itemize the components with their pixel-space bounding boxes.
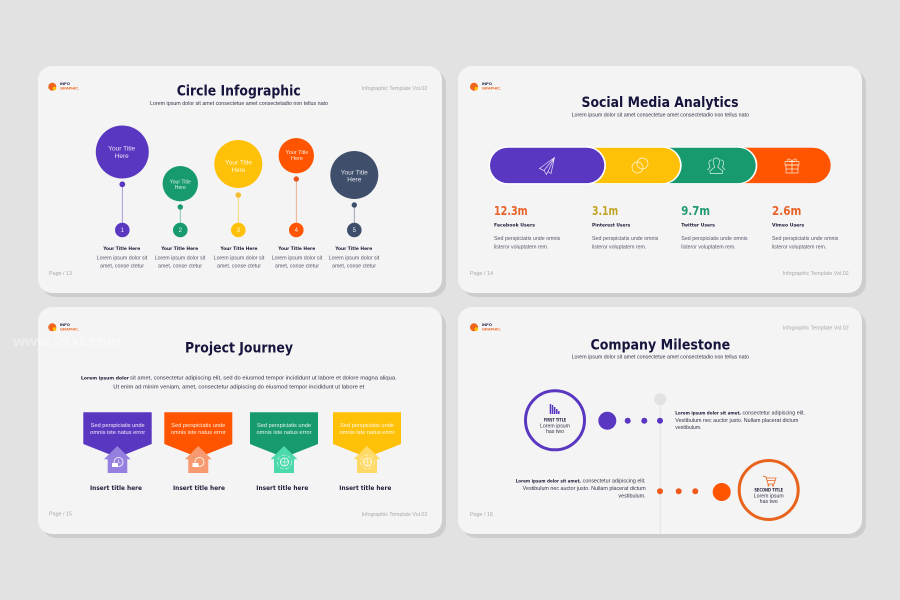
stat: vimeo users: listeror voluptatem rem. xyxy=(772,244,826,250)
logo: GRAPHIC. xyxy=(482,328,501,332)
circle item 2: amet, conse ctetur xyxy=(158,264,202,270)
circle item 1: Your Title Here xyxy=(102,246,140,252)
page number: Page / 14 xyxy=(470,271,493,277)
milestone 2 ring: SECOND TITLE xyxy=(754,487,783,492)
journey card 2: Sed perspiciatis unde xyxy=(171,423,226,429)
circle item 5: 5 xyxy=(353,228,357,234)
circle item 3: 3 xyxy=(237,228,241,234)
subtitle: Lorem ipsum dolor sit amet consectetue amet consectetadio non tellus nato xyxy=(572,355,749,361)
subtitle: Lorem ipsum dolor sit amet consectetue amet consectetadio non tellus nato xyxy=(150,101,328,107)
circle item 3: Here xyxy=(232,167,246,174)
stat: vimeo users: Vimeo Users xyxy=(772,222,805,228)
stat: vimeo users: Sed perspiciatis unde omnis xyxy=(772,236,839,242)
stat: pinterest users: 3.1m xyxy=(592,204,618,218)
milestone 1 text: consectetur adipiscing elit. xyxy=(742,411,805,417)
title: Social Media Analytics xyxy=(582,95,738,111)
milestone 2 text: Lorem ipsum dolor sit amet, xyxy=(516,479,581,485)
page number: Page / 15 xyxy=(49,512,72,518)
logo: GRAPHIC. xyxy=(60,328,79,332)
stat: vimeo users xyxy=(772,204,839,250)
intro paragraph: Ut enim ad minim veniam, amet, consectetur adipiscing do eiusmod tempor incididunt ut labore et xyxy=(113,384,365,390)
journey card 3: Insert title here xyxy=(256,484,309,492)
icon: shopping cart xyxy=(763,476,776,486)
panel: project journey xyxy=(38,307,446,538)
stat: pinterest users xyxy=(592,204,659,250)
icon: chat bubbles xyxy=(632,158,648,173)
journey card 1 xyxy=(83,412,152,492)
milestone 2 ring xyxy=(739,460,798,520)
stat: twitter users: listeror voluptatem rem. xyxy=(681,244,736,250)
circle item 2: Here xyxy=(175,185,186,191)
watermark: www.25xt.com xyxy=(12,333,121,349)
icon: bar chart xyxy=(550,404,560,414)
circle item 2: Your Title xyxy=(170,180,191,186)
circle item 3: Your Title Here xyxy=(220,246,258,252)
subtitle: Lorem ipsum dolor sit amet consectetue amet consectetadio non tellus nato xyxy=(572,113,749,119)
journey card 4: omnis iste natus error xyxy=(340,430,395,436)
milestone 1 text: Lorem ipsum dolor sit amet, xyxy=(675,411,741,417)
milestone 1 ring: Lorem ipsum xyxy=(540,423,570,429)
circle item 1: Your Title xyxy=(108,146,136,153)
journey card 3 xyxy=(250,412,318,492)
circle item 5: amet, conse ctetur xyxy=(332,264,376,270)
stat: twitter users: Twitter Users xyxy=(681,222,715,228)
circle item 5 xyxy=(329,151,380,270)
logo: GRAPHIC. xyxy=(482,87,501,91)
circle item 2: Your Title Here xyxy=(160,246,198,252)
milestone 1 ring: FIRST TITLE xyxy=(544,417,566,422)
template label: Infographic Template Vol.02 xyxy=(362,512,428,518)
milestone 2 text: vestibulum. xyxy=(618,494,646,500)
stat: twitter users: Sed perspiciatis unde omnis xyxy=(681,236,748,242)
stat: facebook users xyxy=(494,204,561,250)
milestone 1 ring xyxy=(526,391,584,450)
logo xyxy=(48,82,79,91)
icon: users xyxy=(708,158,725,174)
milestone 2 dots xyxy=(657,483,731,501)
template label: Infographic Template Vol.02 xyxy=(783,326,849,332)
milestone 1 text: Vestibulum nec auctor justo. Nullam placerat dictum xyxy=(675,418,798,424)
stat: pinterest users: listeror voluptatem rem. xyxy=(592,244,646,250)
circle item 3: Lorem ipsum dolor sit xyxy=(214,255,265,261)
title: Company Milestone xyxy=(590,337,730,353)
circle item 5: Lorem ipsum dolor sit xyxy=(329,255,380,261)
stat: pinterest users: Sed perspiciatis unde omnis xyxy=(592,236,659,242)
segmented pill bar xyxy=(488,146,831,185)
circle item 4: Lorem ipsum dolor sit xyxy=(272,255,323,261)
milestone 1 text xyxy=(675,411,805,431)
panel: circle infographic xyxy=(38,66,446,297)
circle item 1: Here xyxy=(115,153,129,160)
journey card 4: Sed perspiciatis unde xyxy=(340,423,394,429)
circle item 1: Lorem ipsum dolor sit xyxy=(97,255,148,261)
milestone 2 ring: has two xyxy=(760,499,778,505)
timeline axis xyxy=(654,393,666,534)
milestone 1 text: vestibulum. xyxy=(675,425,702,431)
icon: house arrow chart xyxy=(185,446,212,473)
template label: Infographic Template Vol.02 xyxy=(783,271,849,277)
circle item 3: Your Title xyxy=(225,160,252,167)
stat: facebook users: Facebook Users xyxy=(494,222,535,228)
journey card 2: omnis iste natus error xyxy=(171,430,226,436)
logo: INFO xyxy=(482,323,492,327)
logo xyxy=(48,323,79,332)
stat: facebook users: Sed perspiciatis unde omnis xyxy=(494,236,561,242)
journey card 4: Insert title here xyxy=(339,484,392,492)
logo xyxy=(470,82,501,91)
circle item 4: Your Title xyxy=(286,150,309,156)
circle item 4: Here xyxy=(291,156,303,162)
circle item 2 xyxy=(155,166,206,270)
logo: INFO xyxy=(60,323,70,327)
logo xyxy=(470,323,501,332)
journey card 3: omnis iste natus error xyxy=(256,430,312,436)
stat: facebook users: 12.3m xyxy=(494,204,528,218)
stat: facebook users: listeror voluptatem rem. xyxy=(494,244,548,250)
logo: GRAPHIC. xyxy=(60,87,79,91)
journey card 1: omnis iste natus error xyxy=(90,430,146,436)
circle item 4: amet, conse ctetur xyxy=(275,264,319,270)
panel: social media analytics xyxy=(458,66,866,297)
milestone 2 text: Vestibulum nec auctor justo. Nullam placerat dictum xyxy=(523,486,646,492)
icon: house arrow globe xyxy=(271,446,297,473)
circle item 5: Here xyxy=(347,176,362,184)
icon: paper plane xyxy=(540,158,554,174)
circle item 4 xyxy=(272,138,323,270)
journey card 2 xyxy=(164,412,232,492)
journey card 1: Insert title here xyxy=(90,484,143,492)
page number: Page / 16 xyxy=(470,512,493,518)
intro paragraph xyxy=(81,375,397,390)
icon: house arrow clock xyxy=(104,446,131,473)
milestone 2 text xyxy=(516,479,646,500)
logo: INFO xyxy=(482,82,492,86)
stat: vimeo users: 2.6m xyxy=(772,204,801,218)
circle item 5: Your Title Here xyxy=(334,246,372,252)
circle item 2: 2 xyxy=(179,228,183,234)
circle item 3: amet, conse ctetur xyxy=(217,264,261,270)
circle item 2: Lorem ipsum dolor sit xyxy=(155,255,206,261)
stat: twitter users: 9.7m xyxy=(681,204,710,218)
journey card 3: Sed perspiciatis unde xyxy=(257,423,311,429)
circle item 4: Your Title Here xyxy=(277,246,315,252)
milestone 2 text: consectetur adipiscing elit. xyxy=(583,479,646,485)
intro paragraph: Lorem ipsum dolor xyxy=(81,375,130,381)
stat: twitter users xyxy=(681,204,748,250)
panel: company milestone xyxy=(458,307,866,538)
icon: gift xyxy=(785,159,799,173)
template label: Infographic Template Vol.02 xyxy=(362,86,428,92)
milestone 1 dots xyxy=(598,412,663,430)
circle item 3 xyxy=(214,140,265,270)
title: Project Journey xyxy=(185,340,293,356)
circle item 1 xyxy=(96,126,149,270)
circle item 5: Your Title xyxy=(341,170,368,176)
stat: pinterest users: Pinterest Users xyxy=(592,222,631,228)
logo: INFO xyxy=(60,82,70,86)
circle item 4: 4 xyxy=(295,228,299,234)
journey card 2: Insert title here xyxy=(173,484,226,492)
journey card 4 xyxy=(333,412,401,492)
milestone 2 ring: Lorem ipsum xyxy=(754,493,784,499)
journey card 1: Sed perspiciatis unde xyxy=(91,423,145,429)
title: Circle Infographic xyxy=(177,84,301,100)
intro paragraph: sit amet, consectetur adipiscing elit, sed do eiusmod tempor incididunt ut labore et dolore magna aliqua. xyxy=(130,375,397,381)
page number: Page / 13 xyxy=(49,271,72,277)
circle item 1: 1 xyxy=(121,228,125,234)
icon: house arrow target xyxy=(354,446,380,473)
milestone 1 ring: has two xyxy=(546,429,564,435)
circle item 1: amet, conse ctetur xyxy=(100,264,144,270)
